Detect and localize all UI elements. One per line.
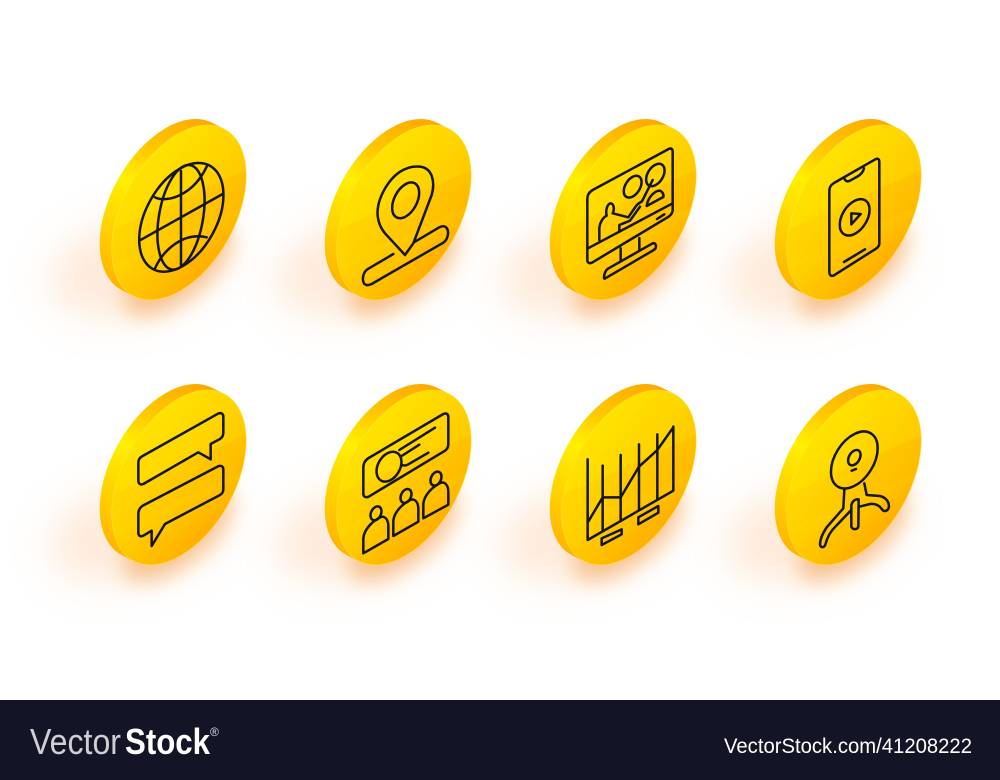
icon: speaker and audience <box>363 413 448 553</box>
panel: globe coin <box>100 119 246 300</box>
brand logo text: Vector <box>30 721 121 762</box>
brand logo text <box>30 721 219 762</box>
icon: map pin <box>363 166 448 285</box>
icon: chart <box>588 427 673 545</box>
panel: location pin coin <box>325 119 471 300</box>
panel: presentation audience coin <box>325 384 471 565</box>
icon: speech bubbles <box>138 413 223 546</box>
panel: phone video coin <box>775 119 921 300</box>
panel: chat bubbles coin <box>100 384 246 565</box>
brand logo text: ® <box>210 725 219 739</box>
image id text: VectorStock.com/41208222 <box>724 735 972 758</box>
coin shadows <box>39 195 923 600</box>
footer bar <box>0 700 1000 780</box>
icon: globe <box>122 149 241 286</box>
icon: disc on stand <box>820 423 889 547</box>
panel: online presentation monitor coin <box>550 119 696 300</box>
brand logo text: Stock <box>125 721 211 762</box>
icon: smartphone with play button <box>829 159 879 276</box>
icon: monitor with presenter <box>587 148 673 279</box>
panel: bar and line chart coin <box>550 384 696 565</box>
panel: microphone stand coin <box>775 384 921 565</box>
